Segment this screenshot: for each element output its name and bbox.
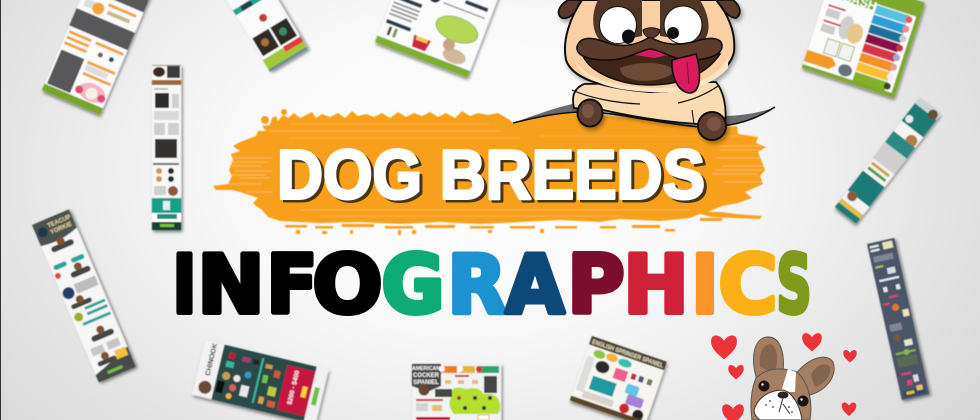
heading: INFOGRAPHICS: C [718, 238, 778, 332]
heading: DOG BREEDS: DOG BREEDS [277, 136, 705, 214]
pug left paw [578, 100, 602, 126]
heading: INFOGRAPHICS: I [172, 238, 196, 332]
thumbnail: BASH infographic [802, 0, 925, 98]
heading: DOG BREEDS: DOG BREEDS [280, 138, 708, 216]
bulldog nose [778, 392, 788, 398]
thumbnail: English Springer Spaniel infographic [570, 336, 667, 420]
icon: hearts [711, 333, 857, 420]
illustration: torn paper slit [513, 103, 775, 127]
pug right paw [698, 112, 726, 140]
heading: INFOGRAPHICS: O [312, 238, 382, 332]
pug eye mask [593, 0, 709, 44]
pug tongue [672, 54, 700, 93]
heading: INFOGRAPHICS: S [776, 238, 812, 332]
thumbnail: teacup yorkie infographic [32, 209, 136, 382]
bulldog head [751, 369, 811, 420]
thumbnail title: ENGLISH SPRINGER SPANIEL [591, 339, 664, 370]
heading: INFOGRAPHICS: I [692, 238, 718, 332]
pug eyes [600, 6, 636, 44]
thumbnail: top-centre tree infographic [375, 0, 501, 77]
pug moustache [577, 37, 722, 60]
heading: INFOGRAPHICS: F [266, 238, 318, 332]
thumbnail: teacup yorkie infographic: YORKIE [50, 222, 73, 236]
thumbnail: teal and green infographic [213, 0, 308, 72]
thumbnail: American Cocker Spaniel infographic: COCKER [413, 373, 440, 379]
pug neck creases [572, 90, 640, 104]
heading: INFOGRAPHICS: N [198, 238, 264, 332]
illustration: French bulldog [751, 337, 834, 420]
orange brush stroke [213, 109, 766, 235]
brush streaks [228, 124, 764, 216]
pug body [573, 82, 726, 124]
thumbnail: American Cocker Spaniel infographic [412, 364, 501, 420]
pug head [565, 0, 734, 92]
thumbnail title: CHINOOK [205, 343, 219, 377]
bulldog white blaze [781, 369, 796, 392]
heading: INFOGRAPHICS: H [624, 238, 688, 332]
bulldog eyes [758, 380, 770, 392]
pug mouth [582, 46, 720, 85]
heading: INFOGRAPHICS: A [506, 238, 565, 332]
heading: INFOGRAPHICS: R [448, 238, 506, 332]
thumbnail: dark slate tall infographic [867, 238, 929, 400]
thumbnail title: TEACUP [47, 214, 72, 230]
bulldog left ear [754, 337, 783, 385]
bulldog right ear [795, 357, 834, 396]
heading: INFOGRAPHICS: G [382, 238, 444, 332]
illustration: pug [559, 0, 740, 140]
price text: $200 - $400 [286, 370, 301, 405]
brush splatter [261, 109, 722, 235]
thumbnail: American Cocker Spaniel infographic: SPANIEL [413, 380, 439, 386]
thumbnail title: AMERICAN [412, 366, 440, 372]
thumbnail: dark breed infographic with price [192, 340, 328, 420]
thumbnail: tall narrow infographic [152, 65, 181, 230]
thumbnail: teal strip infographic [835, 97, 941, 223]
thumbnail: top-left infographic [42, 0, 159, 115]
heading: INFOGRAPHICS: P [568, 238, 624, 332]
pug tongue lip [634, 49, 672, 58]
heading: INFOGRAPHICS [172, 238, 812, 332]
pug nose [643, 28, 660, 38]
pug ears [559, 0, 584, 18]
bulldog muzzle [754, 390, 802, 420]
